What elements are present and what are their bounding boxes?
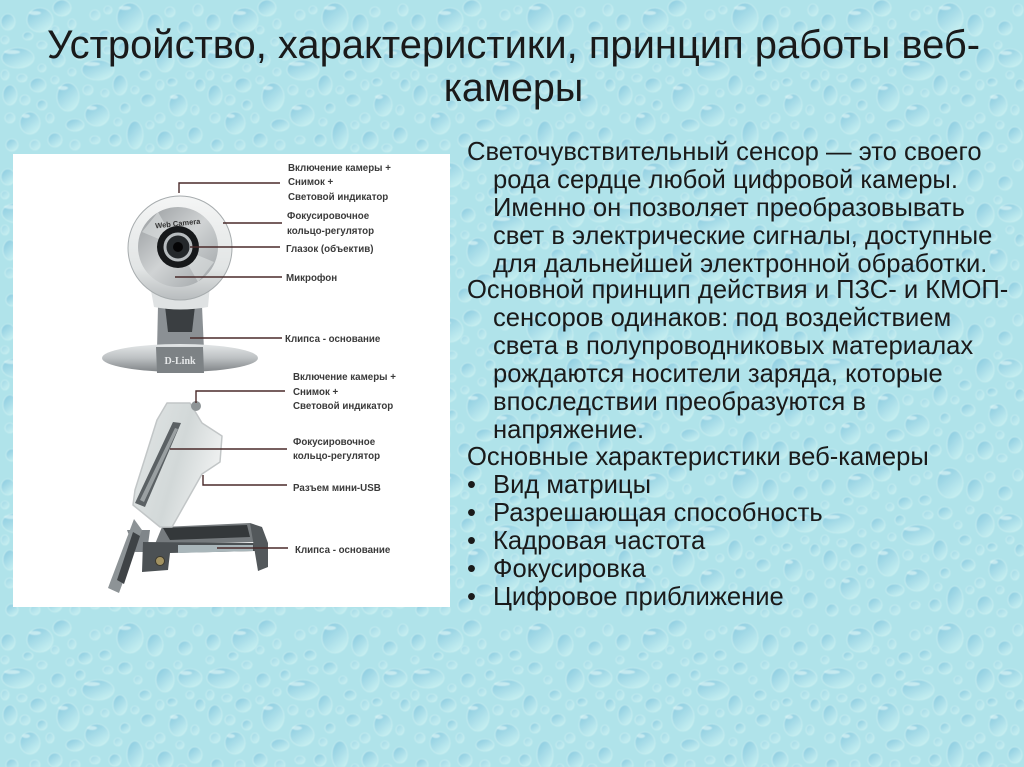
side view labels: Разъем мини-USB	[293, 483, 381, 494]
front view labels: Световой индикатор	[288, 192, 388, 203]
front view labels: Микрофон	[286, 273, 337, 284]
front view labels: Фокусировочное	[287, 211, 370, 222]
front view labels: Включение камеры +	[288, 163, 391, 174]
text block: operating principle: рождаются носители заряда, которые	[493, 360, 943, 388]
text block: characteristics list: •	[467, 555, 476, 583]
text block: sensor description: Светочувствительный сенсор — это своего	[467, 138, 982, 166]
text block: sensor description	[467, 138, 992, 278]
clip arm	[127, 530, 150, 552]
title	[47, 23, 980, 110]
clip front face	[142, 542, 257, 572]
clip top surface	[155, 523, 258, 544]
text block: operating principle: впоследствии преобразуются в	[493, 388, 866, 416]
side view labels: Световой индикатор	[293, 401, 393, 412]
text block: characteristics list: •	[467, 471, 476, 499]
text block: characteristics list: •	[467, 583, 476, 611]
text block: characteristics list: Цифровое приближение	[493, 583, 784, 611]
top button	[150, 196, 210, 207]
screw	[156, 556, 164, 566]
front view of webcam: D-Link	[164, 356, 196, 367]
side view labels: Снимок +	[293, 387, 339, 398]
text block: characteristics list: Вид матрицы	[493, 471, 651, 499]
panel: webcam diagram	[13, 154, 450, 607]
text block: characteristics list: Разрешающая способность	[493, 499, 823, 527]
text block: sensor description: свет в электрические сигналы, доступные	[493, 222, 992, 250]
side view of webcam	[108, 401, 268, 593]
clip hook	[250, 523, 268, 571]
side view labels: Фокусировочное	[293, 437, 376, 448]
side view labels: Включение камеры +	[293, 372, 396, 383]
text block: characteristics list: Кадровая частота	[493, 527, 706, 555]
title: Устройство, характеристики, принцип работы веб-	[47, 23, 980, 67]
front view of webcam	[102, 196, 258, 373]
text block: characteristics list: Основные характеристики веб-камеры	[467, 443, 929, 471]
ring slot	[135, 422, 181, 507]
stand neck	[157, 306, 204, 350]
leader lines	[170, 183, 288, 548]
text block: sensor description: для дальнейшей электронной обработки.	[493, 250, 987, 278]
button	[191, 401, 201, 411]
silver disc	[138, 207, 218, 287]
body	[128, 196, 232, 300]
text block: characteristics list: •	[467, 499, 476, 527]
lower collar	[150, 285, 210, 310]
light strip	[178, 545, 253, 553]
body	[133, 403, 222, 527]
clip flap	[108, 519, 142, 593]
text block: sensor description: Именно он позволяет преобразовывать	[493, 194, 965, 222]
side view labels: кольцо-регулятор	[293, 451, 380, 462]
base	[102, 344, 258, 372]
text block: sensor description: рода сердце любой цифровой камеры.	[493, 166, 958, 194]
front view labels: Клипса - основание	[285, 334, 381, 345]
side view labels: Клипса - основание	[295, 545, 391, 556]
front view labels: кольцо-регулятор	[287, 226, 374, 237]
text block: operating principle: сенсоров одинаков: под воздействием	[493, 304, 951, 332]
front view labels: Снимок +	[288, 177, 334, 188]
text block: operating principle	[467, 276, 1008, 444]
text block: characteristics list: •	[467, 527, 476, 555]
text block: operating principle: напряжение.	[493, 416, 644, 444]
front view of webcam: Web Camera	[155, 217, 202, 230]
text block: operating principle: света в полупроводниковых материалах	[493, 332, 973, 360]
front view labels	[285, 163, 391, 345]
title: камеры	[444, 66, 583, 110]
front view labels: Глазок (объектив)	[286, 244, 373, 255]
text block: characteristics list	[467, 443, 929, 611]
text block: characteristics list: Фокусировка	[493, 555, 647, 583]
side view labels	[293, 372, 396, 556]
text block: operating principle: Основной принцип действия и ПЗС- и КМОП-	[467, 276, 1008, 304]
lens	[157, 226, 199, 268]
